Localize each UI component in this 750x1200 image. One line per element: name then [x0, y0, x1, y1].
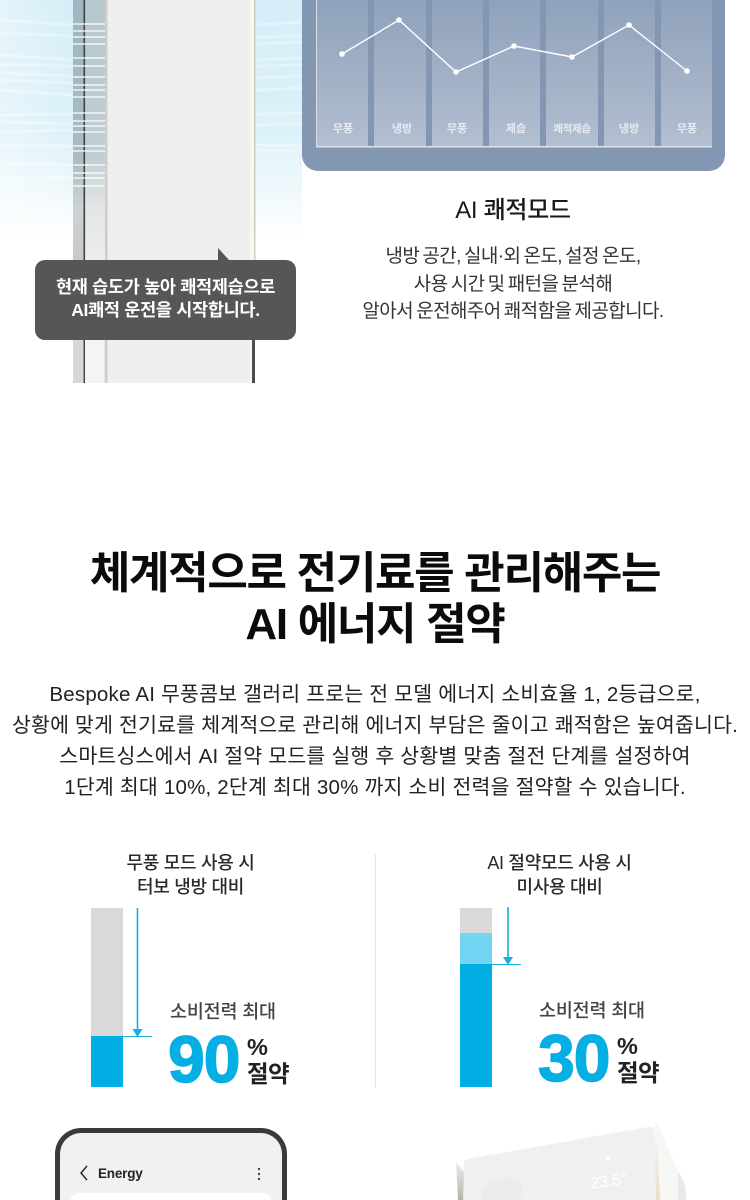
- text: energy saving description: 스마트싱스에서 AI 절약 모드를 실행 후 상황별 맞춤 절전 단계를 설정하여: [59, 745, 691, 768]
- label: 소비전력 최대: [170, 1001, 276, 1022]
- app back arrow: [80, 1166, 88, 1180]
- chart labels: 무풍: [677, 122, 697, 135]
- value: 30: [538, 1021, 609, 1095]
- app title: Energy: [98, 1166, 143, 1181]
- chart labels: 냉방: [619, 122, 639, 135]
- panel: product with airflow: [0, 0, 302, 383]
- chart labels: 무풍: [333, 122, 353, 135]
- divider: [375, 854, 376, 1088]
- chart caption: [487, 853, 632, 896]
- chart: no-wind mode saving 90%: [91, 853, 289, 1096]
- icon: air conditioner body: [73, 0, 256, 383]
- text: AI comfort mode description: 사용 시간 및 패턴을 분석해: [414, 274, 612, 294]
- text: energy saving description: [12, 683, 738, 799]
- app card: [70, 1193, 272, 1200]
- product: wall unit: [456, 1121, 687, 1200]
- text: energy saving description: 상황에 맞게 전기료를 체계적으로 관리해 에너지 부담은 줄이고 쾌적함은 높여줍니다.: [12, 714, 738, 737]
- bar: [460, 907, 521, 1087]
- heading: AI comfort mode: AI 쾌적모드: [455, 197, 571, 224]
- callout: humidity message: 현재 습도가 높아 쾌적제습으로: [56, 277, 275, 297]
- title: AI energy saving: AI 에너지 절약: [245, 600, 505, 649]
- unit: %: [617, 1033, 637, 1059]
- text: AI comfort mode description: [362, 246, 664, 322]
- chart caption: AI 절약모드 사용 시: [487, 853, 632, 873]
- unit: %: [247, 1034, 267, 1060]
- app menu icon: [258, 1168, 260, 1180]
- chart labels: 냉방: [392, 122, 412, 135]
- title: AI energy saving: [90, 549, 660, 649]
- phone: energy app: [55, 1128, 287, 1200]
- line chart: [339, 17, 690, 75]
- callout: humidity message: AI쾌적 운전을 시작합니다.: [71, 300, 260, 320]
- text: energy saving description: 1단계 최대 10%, 2단계 최대 30% 까지 소비 전력을 절약할 수 있습니다.: [64, 776, 686, 799]
- chart caption: 미사용 대비: [516, 876, 602, 896]
- unit: [617, 1033, 659, 1086]
- chart labels: 제습: [506, 121, 526, 135]
- chart caption: 터보 냉방 대비: [137, 876, 244, 896]
- text: AI comfort mode description: 알아서 운전해주어 쾌적함을 제공합니다.: [362, 301, 664, 322]
- unit: [247, 1034, 289, 1087]
- chart labels: 무풍: [447, 122, 467, 135]
- bar: [91, 908, 152, 1087]
- value: 90: [168, 1022, 239, 1096]
- title: AI energy saving: 체계적으로 전기료를 관리해주는: [90, 549, 660, 598]
- callout: humidity message: [35, 248, 296, 340]
- text: energy saving description: Bespoke AI 무풍콤보 갤러리 프로는 전 모델 에너지 소비효율 1, 2등급으로,: [49, 683, 701, 706]
- unit: 절약: [247, 1061, 289, 1087]
- chart caption: 무풍 모드 사용 시: [127, 853, 254, 873]
- unit: 절약: [617, 1060, 659, 1086]
- text: AI comfort mode description: 냉방 공간, 실내·외 온도, 설정 온도,: [385, 246, 641, 267]
- label: 소비전력 최대: [539, 1000, 645, 1021]
- chart labels: [333, 121, 697, 135]
- panel: AI comfort mode schedule chart: [302, 0, 725, 171]
- display reading: 23.5°: [589, 1171, 629, 1193]
- chart labels: 쾌적제습: [553, 122, 591, 135]
- chart: AI saving mode 30%: [460, 853, 659, 1095]
- chart caption: [127, 853, 254, 896]
